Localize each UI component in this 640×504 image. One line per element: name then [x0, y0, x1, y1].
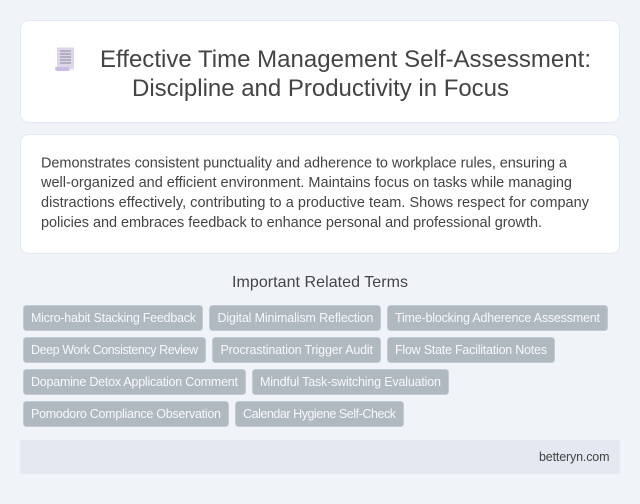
tag	[210, 306, 380, 330]
footer source text: betteryn.com	[539, 450, 610, 464]
tag: Digital Minimalism Reflection	[218, 311, 374, 325]
description text: Demonstrates consistent punctuality and adherence to workplace rules, ensuring a	[41, 156, 568, 172]
tag	[212, 338, 380, 362]
footer bar	[20, 440, 620, 474]
tag	[24, 370, 246, 394]
tag: Flow State Facilitation Notes	[395, 343, 547, 357]
title: Discipline and Productivity in Focus	[132, 75, 509, 102]
tag	[236, 402, 404, 426]
tag	[24, 338, 206, 362]
tag: Dopamine Detox Application Comment	[31, 375, 239, 389]
tag list	[24, 306, 608, 426]
icon: document scroll	[55, 48, 74, 71]
tag	[252, 370, 448, 394]
heading: important related terms: Important Related Terms	[232, 274, 408, 291]
tag: Time-blocking Adherence Assessment	[395, 311, 601, 325]
panel: title card	[20, 20, 620, 122]
tag: Pomodoro Compliance Observation	[31, 407, 221, 421]
tag	[388, 338, 554, 362]
description text: policies and embraces feedback to enhance personal and professional growth.	[41, 215, 542, 231]
tag: Mindful Task-switching Evaluation	[260, 375, 441, 389]
title: Effective Time Management Self-Assessment:	[100, 46, 591, 73]
tag: Calendar Hygiene Self-Check	[243, 407, 397, 421]
tag	[24, 402, 228, 426]
tag	[388, 306, 608, 330]
tag: Deep Work Consistency Review	[31, 343, 199, 357]
panel: description card	[20, 134, 620, 254]
description text	[40, 156, 590, 231]
description text: well-organized and efficient environment. Maintains focus on tasks while managing	[40, 175, 572, 191]
description text: distractions effectively, contributing to a productive team. Shows respect for company	[41, 195, 590, 211]
tag: Micro-habit Stacking Feedback	[31, 311, 197, 325]
tag	[24, 306, 202, 330]
tag: Procrastination Trigger Audit	[220, 343, 374, 357]
title	[100, 46, 591, 102]
